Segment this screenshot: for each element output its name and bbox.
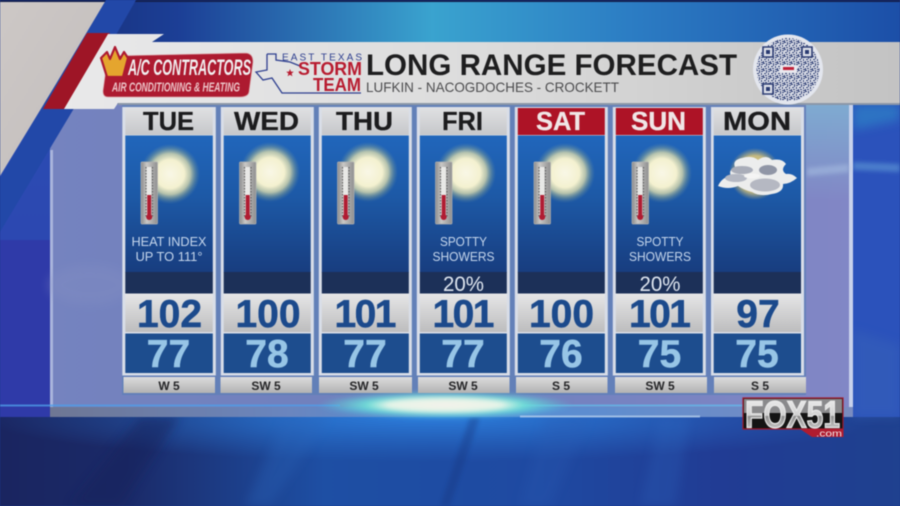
wind: [714, 377, 806, 393]
sky panel: [420, 136, 507, 272]
low temperature: [125, 334, 213, 373]
high temperature: [518, 294, 605, 332]
low temperature: [420, 334, 507, 373]
icon: thermometer: [141, 162, 158, 224]
column: Sunday: [613, 106, 707, 393]
column: Saturday: [515, 106, 608, 393]
column: Sunday: SUN: [631, 106, 686, 136]
icon: thermometer: [436, 162, 452, 224]
subtitle: cities: LUFKIN - NACOGDOCHES - CROCKETT: [366, 79, 619, 95]
day header: [224, 108, 311, 135]
column: Wednesday: [220, 106, 314, 393]
station text: East Texas: EAST TEXAS: [282, 52, 362, 64]
QR code badge: [753, 34, 823, 104]
column: Tuesday: [122, 106, 216, 393]
sky panel: [125, 136, 213, 272]
high temperature: [224, 294, 311, 332]
column: Saturday: 76: [539, 333, 583, 376]
column: Sunday: 75: [638, 333, 681, 376]
column: Tuesday: 77: [147, 333, 190, 376]
column: Tuesday: UP TO 111°: [136, 250, 202, 264]
column: Monday: 97: [736, 293, 780, 336]
column: Thursday: THU: [336, 106, 393, 136]
column: Wednesday: 78: [245, 333, 289, 376]
day header: [420, 108, 507, 135]
column: Sunday: 101: [629, 293, 691, 336]
column: Saturday: 100: [529, 293, 594, 336]
icon: sun: [632, 143, 692, 203]
icon: sun: [240, 142, 300, 202]
column: Saturday: S 5: [552, 379, 570, 393]
high temperature: [714, 294, 801, 332]
sponsor logo: A/C Contractors: [101, 47, 253, 97]
icon: star: [286, 69, 294, 76]
note: SPOTTY: [440, 235, 488, 249]
column: Saturday: SAT: [536, 106, 585, 136]
title: LONG RANGE FORECAST: [366, 49, 737, 82]
column: Thursday: SW 5: [349, 379, 379, 393]
day header: [714, 108, 801, 135]
station bug: FOX51.com: .com: [816, 428, 842, 440]
sky panel: [518, 136, 605, 272]
icon: sun: [140, 144, 200, 204]
wind: [220, 377, 312, 393]
sky panel: [616, 136, 703, 272]
column: Friday: [417, 106, 510, 393]
wind: [319, 377, 412, 393]
station bug: FOX51.com: FOX51: [745, 394, 840, 436]
column: Monday: MON: [723, 106, 791, 136]
column: Tuesday: 102: [137, 293, 202, 336]
column: Wednesday: SW 5: [251, 379, 281, 393]
icon: partly cloudy: [718, 148, 797, 200]
column: Friday: 77: [441, 333, 485, 376]
icon: thermometer: [240, 162, 256, 224]
high temperature: [616, 294, 703, 332]
column: Friday: 101: [432, 293, 494, 336]
icon: thermometer: [338, 162, 354, 224]
station logo: East Texas Storm Team: [256, 52, 362, 95]
corner graphic: grey triangle and diagonal stripes: [0, 0, 136, 232]
column: Friday: SHOWERS: [432, 250, 494, 264]
high temperature: [125, 294, 213, 332]
header bar: [64, 34, 900, 109]
high temperature: [322, 294, 409, 332]
low temperature: [518, 334, 605, 373]
column: Wednesday: WED: [234, 106, 299, 136]
column: Thursday: [319, 106, 412, 393]
wind: [124, 377, 215, 393]
low temperature: [714, 334, 801, 373]
icon: thermometer: [632, 162, 648, 224]
day header: [518, 108, 605, 135]
station text: Team: TEAM: [313, 74, 361, 95]
column: Monday: 75: [735, 333, 779, 376]
rain chance: 20%: [640, 273, 680, 296]
icon: sun: [338, 142, 398, 202]
wind: [615, 377, 707, 393]
glass panel behind the forecast columns: [48, 104, 853, 417]
low temperature: [322, 334, 409, 373]
column: Monday: [711, 106, 806, 393]
column: Sunday: SHOWERS: [629, 250, 691, 264]
column: Friday: FRI: [442, 106, 483, 136]
column: Wednesday: 100: [235, 293, 301, 336]
column: Sunday: SW 5: [645, 379, 675, 393]
sky panel: [322, 136, 409, 272]
column: Thursday: 77: [343, 333, 387, 376]
icon: Texas outline: [256, 54, 361, 93]
sky panel: [224, 136, 311, 272]
rain chance: 20%: [443, 273, 484, 296]
column: Tuesday: W 5: [158, 379, 180, 393]
note: HEAT INDEX: [132, 235, 207, 249]
glowing horizon line: [0, 391, 760, 419]
high temperature: [420, 294, 507, 332]
icon: sun: [436, 143, 496, 203]
low temperature: [616, 334, 703, 373]
icon: sun: [535, 143, 595, 203]
logo tagline: AIR CONDITIONING & HEATING: [111, 80, 240, 94]
logo name: A/C CONTRACTORS: [127, 55, 251, 80]
wind: [418, 377, 510, 393]
logo badge: [103, 53, 253, 97]
icon: thermometer: [534, 162, 550, 224]
column: Monday: S 5: [751, 379, 769, 393]
column: Tuesday: TUE: [143, 106, 194, 136]
icon: crown: [101, 47, 128, 77]
day header: [322, 108, 409, 135]
sky panel: [714, 136, 801, 272]
station text: Storm: STORM: [298, 58, 362, 79]
column: Friday: SW 5: [448, 379, 478, 393]
low temperature: [224, 334, 311, 373]
day header: [616, 108, 703, 135]
column: Thursday: 101: [334, 293, 396, 336]
note: SPOTTY: [636, 235, 684, 249]
day header: [125, 108, 213, 135]
wind: [516, 377, 608, 393]
